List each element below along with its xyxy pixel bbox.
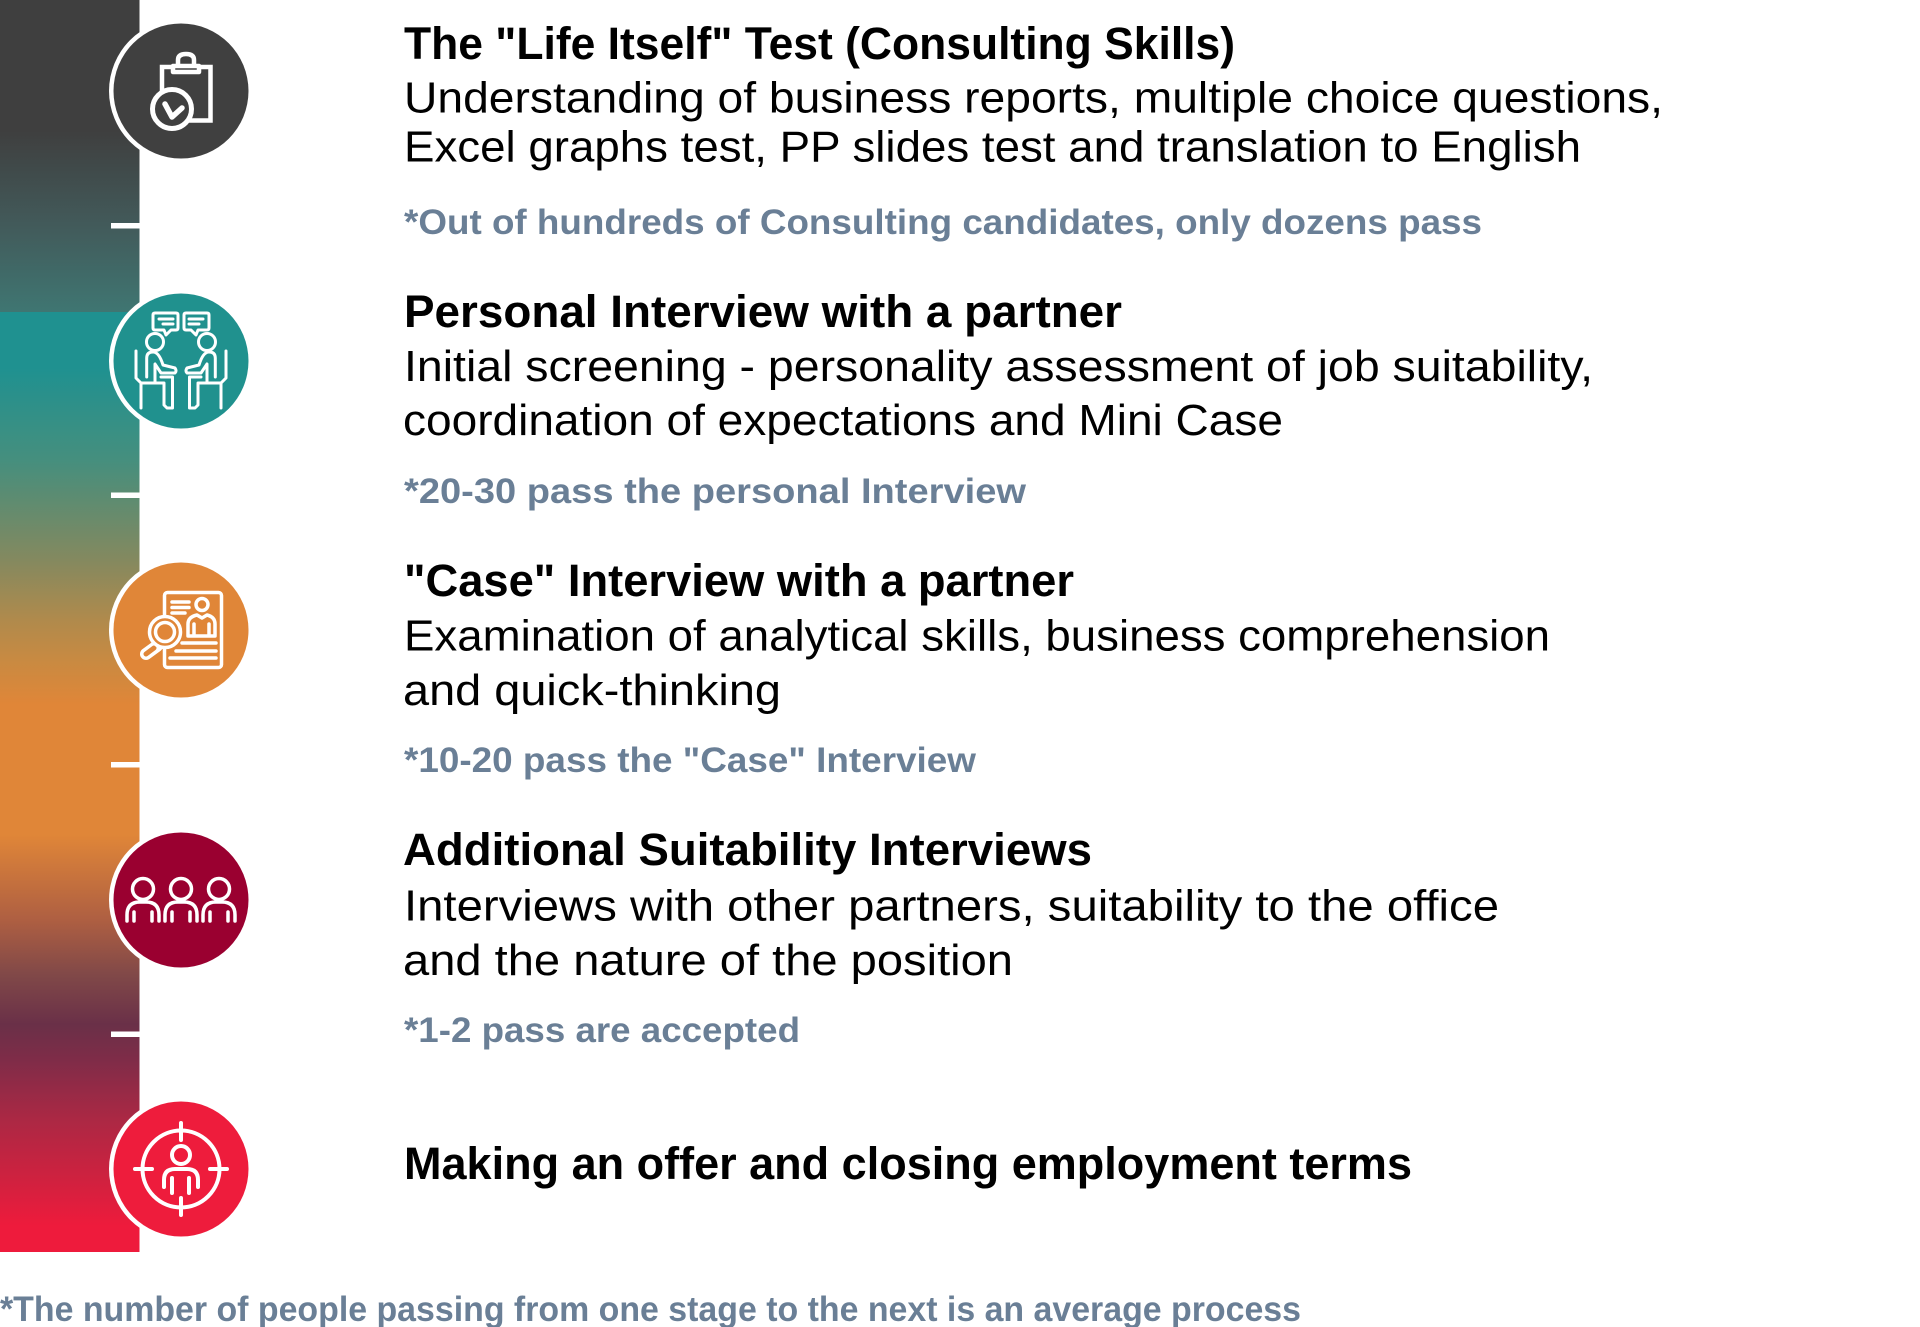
stage 3 text xyxy=(403,555,1550,780)
stage 3 text: Examination of analytical skills, business comprehension xyxy=(404,612,1550,660)
stage 4 text: *1-2 pass are accepted xyxy=(404,1011,800,1050)
stage 2 text: coordination of expectations and Mini Case xyxy=(403,397,1283,445)
stage 5 heading: Making an offer and closing employment terms xyxy=(404,1138,1412,1189)
stage 2 text xyxy=(403,286,1593,511)
stage 4 text: Interviews with other partners, suitability to the office xyxy=(404,882,1499,930)
right seated person xyxy=(186,334,226,408)
icon: two people in interview at a table xyxy=(109,289,253,433)
stage 4 text xyxy=(403,824,1499,1050)
stage 2 text: Initial screening - personality assessment of job suitability, xyxy=(404,343,1593,391)
icon: clipboard with check mark xyxy=(109,19,253,163)
stage 1 text xyxy=(404,18,1663,242)
stage 2 text: *20-30 pass the personal Interview xyxy=(404,472,1027,511)
stage 3 text: *10-20 pass the "Case" Interview xyxy=(404,741,977,780)
stage 1 text: Excel graphs test, PP slides test and translation to English xyxy=(404,124,1581,172)
icon: person in target crosshair xyxy=(109,1097,253,1241)
stage 4 text: and the nature of the position xyxy=(403,937,1013,985)
stage 1 text: Understanding of business reports, multiple choice questions, xyxy=(404,74,1663,122)
timeline tick marks xyxy=(111,223,140,1037)
gradient timeline bar xyxy=(0,0,140,1252)
stage 2 text: Personal Interview with a partner xyxy=(404,286,1122,337)
stage 3 text: "Case" Interview with a partner xyxy=(404,555,1074,606)
icon: three people group xyxy=(109,828,253,972)
left speech bubble xyxy=(153,313,178,335)
stage 1 text: The "Life Itself" Test (Consulting Skills) xyxy=(404,18,1235,69)
stage 1 text: *Out of hundreds of Consulting candidates, only dozens pass xyxy=(404,203,1482,242)
left seated person xyxy=(136,334,176,408)
stage 4 text: Additional Suitability Interviews xyxy=(403,824,1092,875)
icon: magnifier over candidate CV xyxy=(109,558,253,702)
right speech bubble xyxy=(184,313,209,335)
stage 3 text: and quick-thinking xyxy=(403,667,781,715)
